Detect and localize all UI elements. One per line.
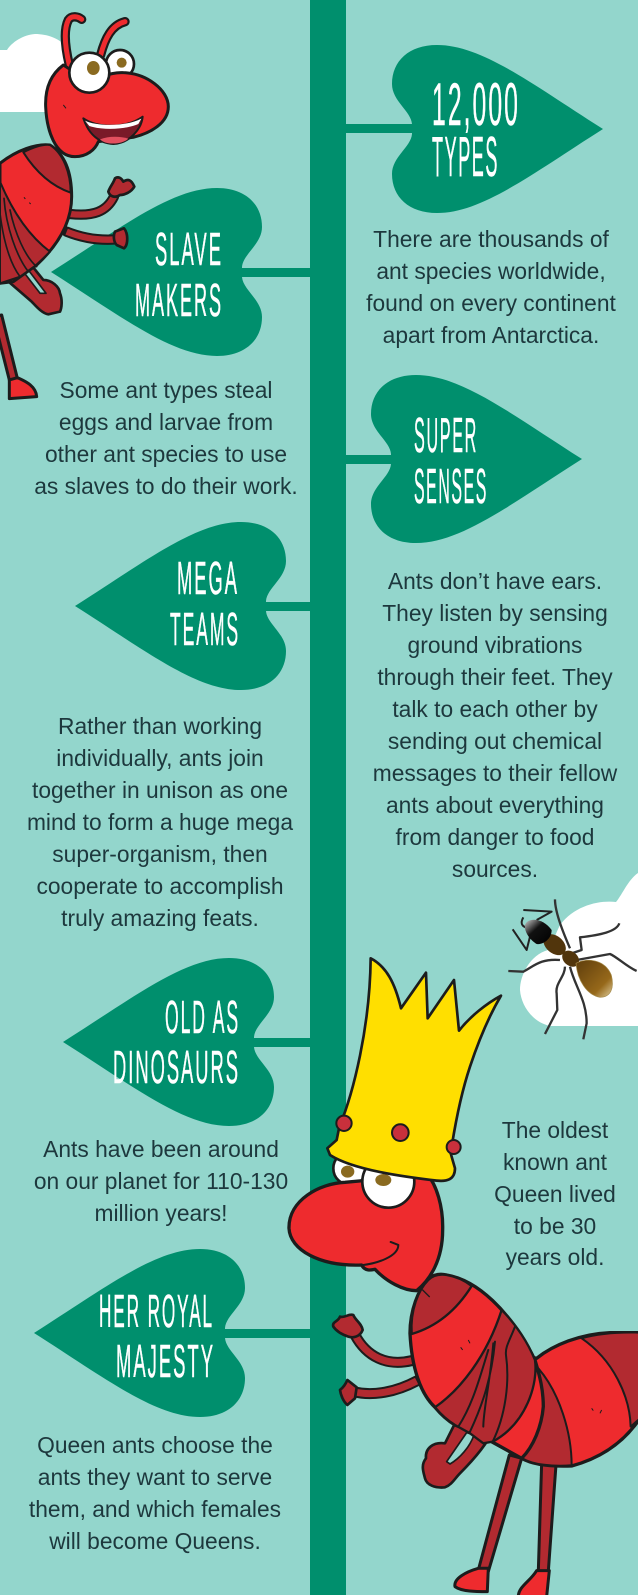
text: species: found on every continent (366, 290, 616, 316)
text: species (366, 226, 616, 348)
text: slave makers: as slaves to do their work. (34, 473, 298, 499)
text: oldest queen: to be 30 (514, 1213, 596, 1239)
text: slave makers: other ant species to use (45, 441, 287, 467)
icon: realistic ant (508, 899, 637, 1039)
text: mega teams (27, 713, 293, 931)
text: species: apart from Antarctica. (383, 322, 599, 348)
text: super senses: talk to each other by (392, 696, 598, 722)
text: mega teams: individually, ants join (56, 745, 264, 771)
text: super senses: Ants don’t have ears. (388, 568, 602, 594)
text: HER ROYAL (99, 1285, 214, 1337)
leaf heading: super senses: SUPER (414, 409, 478, 463)
text: old as dinosaurs (34, 1136, 288, 1226)
text: species: There are thousands of (373, 226, 610, 252)
text: super senses: They listen by sensing (382, 600, 608, 626)
leaf heading: super senses (371, 375, 582, 543)
stem branch: mega teams (264, 602, 314, 611)
leaf heading: her royal majesty: MAJESTY (116, 1335, 215, 1387)
text: oldest queen: known ant (503, 1149, 608, 1175)
text: super senses: sending out chemical (388, 728, 602, 754)
cloud: right (520, 873, 638, 1026)
text: mega teams: super-organism, then (52, 841, 268, 867)
text: super senses: from danger to food (396, 824, 594, 850)
text: species: ant species worldwide, (376, 258, 606, 284)
leaf heading: 12,000 types: TYPES (432, 125, 499, 189)
text: slave makers: eggs and larvae from (59, 409, 273, 435)
stem branch: her royal majesty (222, 1329, 312, 1338)
leaf heading: slave makers: SLAVE (155, 223, 223, 275)
leaf heading: her royal majesty (34, 1249, 245, 1417)
leaf heading: 12,000 types (392, 45, 603, 213)
text: mega teams: cooperate to accomplish (36, 873, 284, 899)
stem branch: old as dinosaurs (250, 1038, 314, 1047)
text: slave makers: Some ant types steal (60, 377, 272, 403)
text: oldest queen (494, 1117, 616, 1270)
leaf heading: old as dinosaurs: OLD AS (165, 991, 240, 1043)
text: oldest queen: Queen lived (494, 1181, 616, 1207)
stem branch: slave makers (240, 268, 315, 277)
stem branch: super senses (340, 455, 395, 464)
text: oldest queen: The oldest (502, 1117, 609, 1143)
text: mega teams: Rather than working (58, 713, 262, 739)
text: super senses: sources. (452, 856, 538, 882)
text: old as dinosaurs: on our planet for 110-130 (34, 1168, 288, 1194)
text: her royal majesty: them, and which females (29, 1496, 281, 1522)
leaf heading: old as dinosaurs (63, 958, 274, 1126)
ant: queen (289, 1152, 638, 1595)
crown (327, 958, 501, 1181)
text: slave makers (34, 377, 298, 499)
text: super senses: through their feet. They (377, 664, 613, 690)
text: super senses (373, 568, 618, 882)
text: super senses: messages to their fellow (373, 760, 618, 786)
central stem (310, 0, 346, 1595)
cloud: top left (0, 34, 70, 112)
leaf heading: mega teams: TEAMS (170, 603, 240, 655)
leaf heading: mega teams (75, 522, 286, 690)
text: super senses: ground vibrations (408, 632, 582, 658)
text: mega teams: mind to form a huge mega (27, 809, 293, 835)
text: super senses: ants about everything (386, 792, 604, 818)
text: her royal majesty: will become Queens. (48, 1528, 261, 1554)
text: her royal majesty: ants they want to serve (38, 1464, 272, 1490)
text: her royal majesty: Queen ants choose the (37, 1432, 273, 1458)
text: mega teams: truly amazing feats. (61, 905, 259, 931)
leaf heading: super senses: SENSES (414, 460, 488, 514)
ant: top left mascot (0, 17, 168, 399)
leaf heading: slave makers: MAKERS (135, 274, 223, 326)
text: old as dinosaurs: Ants have been around (43, 1136, 279, 1162)
text: mega teams: together in unison as one (32, 777, 288, 803)
text: old as dinosaurs: million years! (94, 1200, 228, 1226)
text: oldest queen: years old. (506, 1244, 604, 1270)
text: her royal majesty (29, 1432, 281, 1554)
leaf heading: old as dinosaurs: DINOSAURS (113, 1041, 240, 1093)
stem branch: 12,000 types (340, 124, 415, 133)
leaf heading: slave makers (51, 188, 262, 356)
leaf heading: mega teams: MEGA (177, 552, 239, 604)
